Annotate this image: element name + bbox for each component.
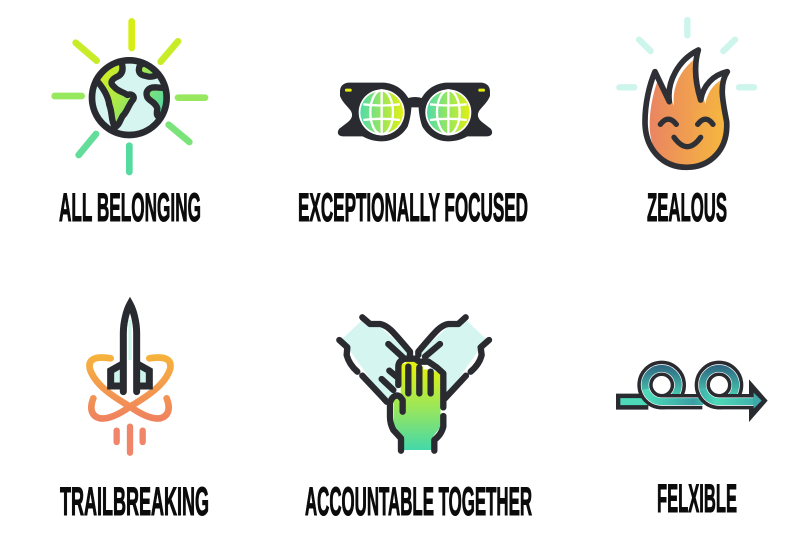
first loop [645,368,678,402]
right lens [425,89,471,135]
flame outline [645,50,727,167]
center hand fill [394,362,441,450]
rocket body [111,304,149,392]
sun rays [55,21,205,172]
arrowhead [749,379,768,422]
frame studs [345,89,485,92]
exhaust flames [117,427,143,453]
icon: globe with sun rays [55,21,205,172]
globe [90,60,172,135]
hand outlines [339,317,489,451]
icon: stacked hands [339,317,489,451]
icon: smiling flame [619,20,754,171]
second loop [702,368,736,402]
left lens [359,89,405,135]
text: ALL BELONGING [59,186,201,230]
side hands fill [342,321,487,404]
frame [338,83,492,141]
icon: glasses with globe lenses [338,83,492,141]
orbit loops [90,358,170,418]
rocket fin fill [123,330,137,387]
icon: looping arrow [616,368,768,422]
flame fill [650,60,724,164]
flame rays [619,20,754,87]
smiling face [660,119,713,147]
icon: rocket with orbits [90,304,170,453]
text: TRAILBREAKING [60,480,209,524]
arrow shaft [616,389,762,409]
